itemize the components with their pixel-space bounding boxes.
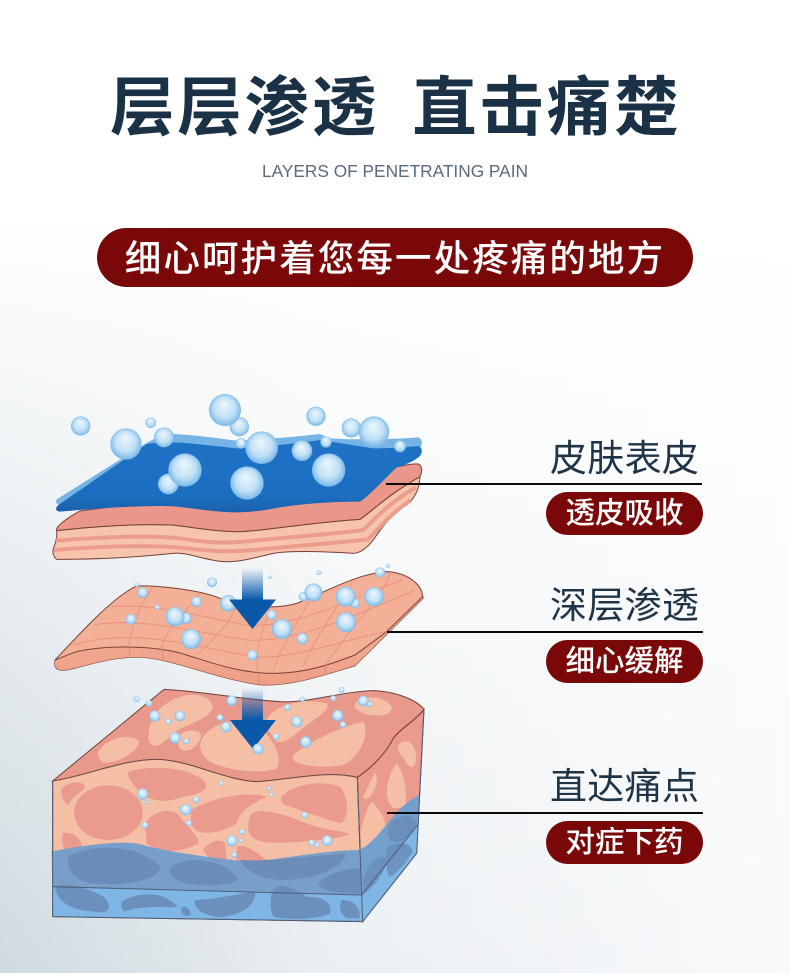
callout 3 leader line bbox=[387, 812, 703, 814]
callout 3 tag: 对症下药 bbox=[565, 826, 684, 859]
edge segment lines bbox=[129, 647, 327, 684]
side blue blobs bbox=[363, 816, 417, 893]
callout 2 tag bbox=[546, 640, 703, 683]
layer 2: deep tissue bbox=[54, 564, 423, 685]
callout 2 leader line bbox=[387, 631, 703, 633]
callout 1 tag: 透皮吸收 bbox=[565, 497, 684, 530]
callout 2 heading: 深层渗透 bbox=[550, 585, 699, 626]
arrow-tip bubble bbox=[252, 744, 264, 754]
callout 1 heading: 皮肤表皮 bbox=[550, 438, 699, 479]
block top bbox=[53, 689, 424, 782]
pale lower skin strip bbox=[53, 477, 420, 562]
top blobs bbox=[98, 695, 392, 771]
bubbles on layer 2 bbox=[126, 564, 390, 661]
dark blue gel bbox=[56, 440, 422, 512]
tissue edge bbox=[54, 595, 423, 685]
blue base blobs bbox=[55, 848, 361, 919]
callout 1 tag bbox=[546, 492, 703, 535]
block front bbox=[53, 759, 363, 922]
title: 层层渗透 直击痛楚 bbox=[110, 72, 681, 144]
tissue top surface bbox=[55, 572, 423, 673]
banner pill: 细心呵护着您每一处疼痛的地方 bbox=[125, 238, 665, 279]
callout 3 tag bbox=[546, 821, 703, 864]
layer 1: epidermis bbox=[53, 394, 422, 562]
layer 3: tissue block bbox=[52, 687, 424, 922]
side blobs bbox=[361, 741, 416, 848]
arrow: down to deep layer bbox=[229, 568, 276, 629]
skin layers illustration bbox=[51, 394, 425, 923]
callout 2 tag: 细心缓解 bbox=[565, 645, 684, 678]
banner pill bbox=[97, 228, 693, 287]
side lower band bbox=[362, 825, 418, 922]
bubbles on layer 1 bbox=[71, 394, 406, 500]
callout 3 heading: 直达痛点 bbox=[550, 766, 699, 807]
arrow: down to tissue block bbox=[230, 688, 276, 749]
callout 1 leader line bbox=[386, 483, 702, 485]
front blobs bbox=[61, 768, 350, 862]
light blue gel back bbox=[56, 434, 422, 505]
tissue grid lines bbox=[73, 573, 415, 673]
block side bbox=[357, 709, 424, 922]
block outlines bbox=[52, 709, 424, 922]
blue base front bbox=[52, 843, 363, 922]
pink stripes bbox=[54, 487, 416, 551]
pink upper skin bbox=[57, 464, 422, 532]
light blue bottom band bbox=[52, 887, 363, 921]
subtitle: LAYERS OF PENETRATING PAIN bbox=[262, 161, 528, 181]
blue base side bbox=[360, 795, 420, 922]
bubbles on layer 3 bbox=[134, 687, 373, 858]
